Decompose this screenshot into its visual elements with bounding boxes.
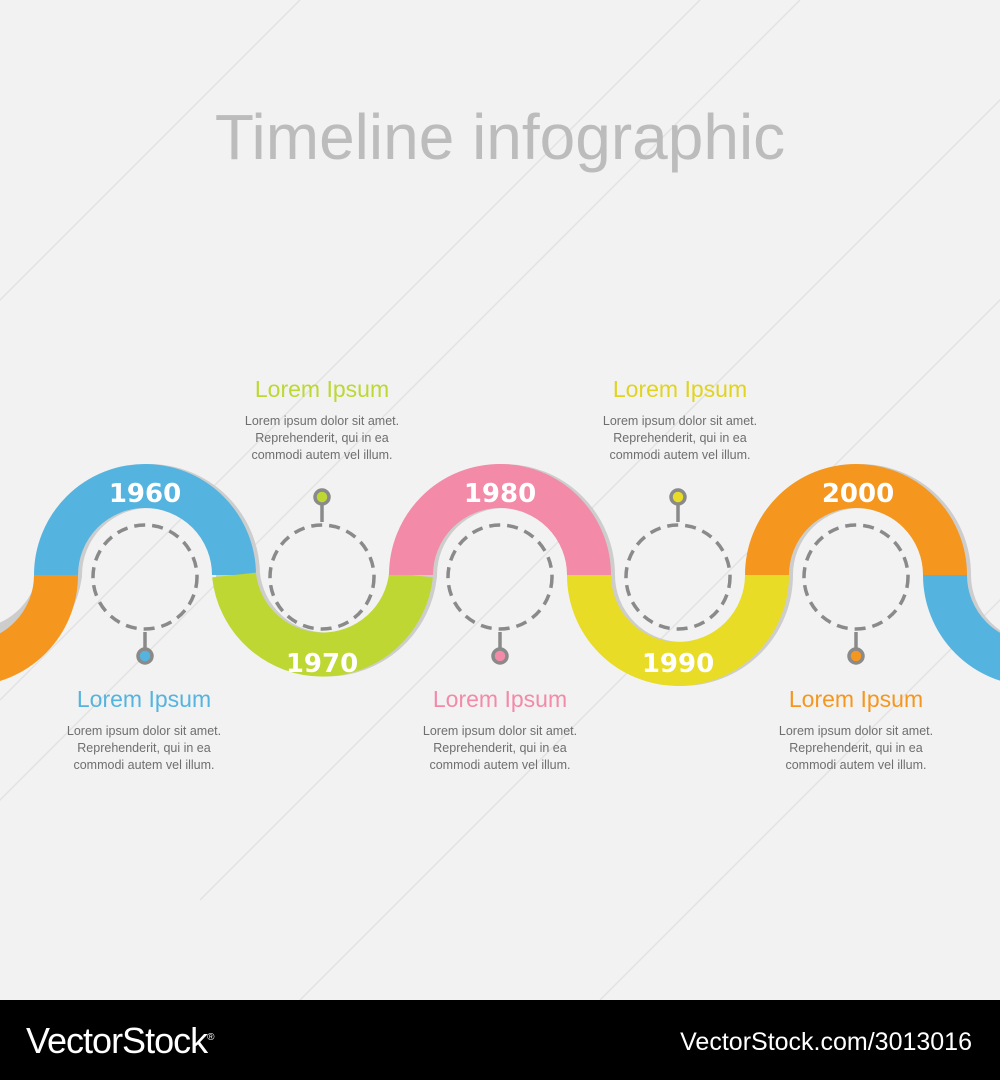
- segment: 2000 orange: [767, 486, 945, 575]
- text: 1960 bottom: commodi autem vel illum.: [73, 758, 214, 772]
- text: 1980 bottom: Lorem Ipsum: [433, 686, 567, 712]
- text: 2000 bottom: commodi autem vel illum.: [785, 758, 926, 772]
- text: 1960 bottom: Lorem Ipsum: [77, 686, 211, 712]
- footer bar: VectorStock®: [26, 1020, 213, 1061]
- text: 1990 top: Lorem ipsum dolor sit amet.: [603, 414, 757, 428]
- footer bar: [0, 1000, 1000, 1080]
- dashed circles: [93, 525, 908, 629]
- text: 1970 top: Lorem ipsum dolor sit amet.: [245, 414, 399, 428]
- year labels: 1990: [642, 649, 714, 679]
- year labels: 1970: [286, 649, 358, 679]
- pins: [138, 490, 863, 663]
- text: 2000 bottom: Lorem ipsum dolor sit amet.: [779, 724, 933, 738]
- text: 1970 top: Reprehenderit, qui in ea: [255, 431, 389, 445]
- segment: 1960 blue: [56, 486, 234, 575]
- text: 1960 bottom: [67, 686, 221, 772]
- year labels: 1980: [464, 479, 536, 509]
- text: 1970 top: commodi autem vel illum.: [251, 448, 392, 462]
- title: Timeline infographic: [215, 101, 785, 173]
- year labels: 2000: [822, 479, 894, 509]
- text: 1990 top: [603, 376, 757, 462]
- segment: 1970 green: [234, 575, 411, 655]
- text: 1960 bottom: Lorem ipsum dolor sit amet.: [67, 724, 221, 738]
- year labels: 1960: [109, 479, 181, 509]
- year labels: [109, 479, 894, 679]
- text: 1980 bottom: Reprehenderit, qui in ea: [433, 741, 567, 755]
- text: 2000 bottom: Reprehenderit, qui in ea: [789, 741, 923, 755]
- text: 1990 top: Lorem Ipsum: [613, 376, 747, 402]
- text: 1990 top: commodi autem vel illum.: [609, 448, 750, 462]
- segment: orange left: [0, 575, 56, 664]
- segment: 1980 pink: [411, 486, 589, 575]
- text: 1970 top: [245, 376, 399, 462]
- footer bar: VectorStock.com/3013016: [680, 1028, 972, 1056]
- text: 2000 bottom: [779, 686, 933, 772]
- text: 2000 bottom: Lorem Ipsum: [789, 686, 923, 712]
- text: 1980 bottom: [423, 686, 577, 772]
- segment: blue right: [945, 575, 1000, 664]
- text: 1980 bottom: commodi autem vel illum.: [429, 758, 570, 772]
- text: 1960 bottom: Reprehenderit, qui in ea: [77, 741, 211, 755]
- text: 1990 top: Reprehenderit, qui in ea: [613, 431, 747, 445]
- text: 1970 top: Lorem Ipsum: [255, 376, 389, 402]
- text: 1980 bottom: Lorem ipsum dolor sit amet.: [423, 724, 577, 738]
- segment: 1990 yellow: [589, 575, 767, 664]
